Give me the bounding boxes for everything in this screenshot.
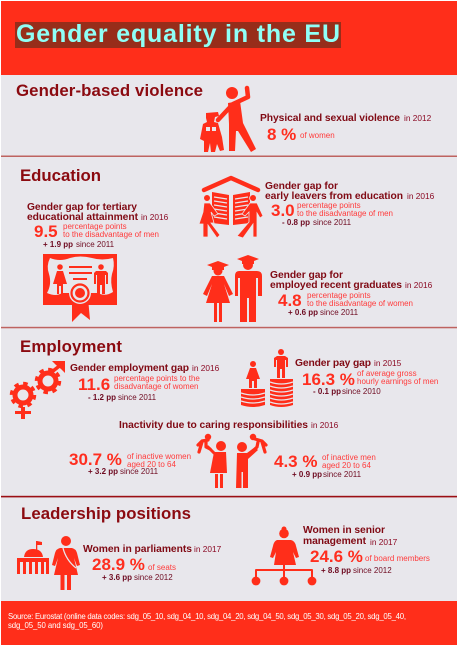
text: inactive women: 30.7 % [69, 450, 122, 469]
text: employment gap: since 2011 [118, 393, 157, 402]
text: physical and sexual violence: in 2012 [404, 113, 432, 123]
text: women in parliaments: Women in parliaments [83, 544, 192, 555]
text: women in senior management: in 2017 [370, 537, 398, 547]
source note [8, 612, 406, 630]
text: employment gap: 11.6 [78, 375, 110, 394]
text: early leavers: percentage points [297, 201, 361, 210]
text: pay gap: in 2015 [374, 358, 402, 368]
header banner [1, 1, 457, 75]
heading: leadership positions: Leadership positions [21, 504, 191, 523]
icon: pay gap coins [241, 349, 293, 407]
heading: employment: Employment [20, 337, 122, 356]
text: women in senior management: since 2012 [353, 566, 392, 575]
icon: woman manager and organisation chart [252, 526, 316, 585]
text: inactive men: 4.3 % [274, 452, 317, 471]
text: women in parliaments [83, 544, 222, 582]
source note: Source: Eurostat (online data codes: sdg_05_10, sdg_04_10, sdg_04_20, sdg_04_50, sdg_05_30, sdg_05_20, sdg_05_40, [8, 612, 406, 621]
text: employment gap: - 1.2 pp [88, 393, 116, 402]
text: employed graduates: since 2011 [320, 308, 359, 317]
text: pay gap: since 2010 [342, 387, 381, 396]
text: pay gap: 16.3 % [302, 370, 355, 389]
text: women in senior management: 24.6 % [310, 547, 363, 566]
text: inactive women: aged 20 to 64 [127, 460, 176, 469]
icon: diploma [43, 254, 117, 322]
title: Gender equality in the EU [16, 20, 340, 48]
text: pay gap: hourly earnings of men [357, 377, 438, 386]
text: early leavers: to the disadvantage of men [297, 209, 393, 218]
text: employed graduates: 4.8 [278, 291, 302, 310]
heading: gender-based violence: Gender-based violence [16, 81, 203, 100]
text: early leavers: early leavers from education [265, 191, 403, 202]
text: inactive women: of inactive women [127, 452, 191, 461]
text: tertiary attainment: + 1.9 pp [43, 240, 73, 249]
text: tertiary attainment: percentage points [63, 222, 127, 231]
source note: sdg_05_50 and sdg_05_60) [8, 621, 103, 630]
panel: leadership positions [17, 504, 430, 590]
text: tertiary attainment: Gender gap for tertiary [27, 202, 137, 213]
icon: early leavers with book [199, 178, 263, 238]
heading: education: Education [20, 166, 101, 185]
text: physical and sexual violence [260, 113, 432, 144]
text: early leavers: - 0.8 pp [282, 218, 310, 227]
text: women in senior management [303, 525, 430, 575]
text: inactive men: aged 20 to 64 [322, 461, 371, 470]
text: employed graduates: + 0.6 pp [288, 308, 318, 317]
text: employment gap: in 2016 [192, 363, 220, 373]
text: women in parliaments: 28.9 % [92, 555, 145, 574]
text: pay gap: of average gross [357, 369, 417, 378]
text: tertiary attainment: to the disadvantage of men [63, 230, 159, 239]
text: employed graduates: percentage points [307, 291, 371, 300]
icon: parents lifting babies [198, 434, 266, 488]
text: tertiary attainment [27, 202, 169, 249]
text: employed graduates: to the disadvantage of women [307, 299, 413, 308]
text: early leavers: in 2016 [407, 191, 435, 201]
text: tertiary attainment: educational attainment [27, 212, 139, 223]
text: women in senior management: management [303, 536, 367, 547]
text: women in parliaments: since 2012 [134, 573, 173, 582]
text: inactive men [274, 452, 376, 479]
text: employment gap: disadvantage of women [114, 382, 198, 391]
text: women in senior management: Women in senior [303, 525, 385, 536]
text: early leavers: since 2011 [313, 218, 352, 227]
text: employment gap: Gender employment gap [70, 363, 189, 374]
text: early leavers [265, 181, 435, 227]
text: women in parliaments: in 2017 [194, 544, 222, 554]
text: employment gap: percentage points to the [114, 374, 200, 383]
text: pay gap: - 0.1 pp [313, 387, 341, 396]
text: early leavers: Gender gap for [265, 181, 338, 192]
text: employed graduates: in 2016 [405, 280, 433, 290]
text: early leavers: 3.0 [271, 201, 295, 220]
footer [1, 601, 457, 645]
text: employed graduates: Gender gap for [270, 270, 343, 281]
text: inactive women: + 3.2 pp [88, 467, 118, 476]
text: pay gap [295, 358, 438, 396]
text: inactive men: + 0.9 pp [292, 470, 322, 479]
text: inactive men: since 2011 [323, 470, 362, 479]
text: women in parliaments: of seats [148, 563, 176, 572]
panel: employment [12, 337, 438, 488]
text: women in senior management: of board members [365, 554, 430, 563]
text: physical and sexual violence: Physical and sexual violence [260, 113, 400, 124]
text: tertiary attainment: since 2011 [76, 240, 115, 249]
icon: violence against a woman [200, 87, 256, 152]
text: tertiary attainment: in 2016 [141, 212, 169, 222]
text: employed graduates: employed recent graduates [270, 280, 402, 291]
text: inactive men: of inactive men [322, 453, 376, 462]
text: employment gap [70, 363, 220, 402]
heading: inactivity: Inactivity due to caring responsibilities [119, 420, 308, 431]
text: physical and sexual violence: of women [300, 131, 335, 140]
text: tertiary attainment: 9.5 [34, 222, 58, 241]
icon: gender gears [12, 361, 65, 419]
text: employed graduates [270, 270, 433, 317]
text: physical and sexual violence: 8 % [267, 125, 296, 144]
panel: education [20, 166, 435, 322]
text: inactive women: since 2011 [120, 467, 159, 476]
text: women in parliaments: + 3.6 pp [102, 573, 132, 582]
panel: gender-based violence [16, 81, 432, 152]
text: pay gap: Gender pay gap [295, 358, 371, 369]
heading: inactivity: in 2016 [311, 420, 339, 430]
icon: graduates [203, 255, 262, 322]
text: women in senior management: + 8.8 pp [321, 566, 351, 575]
text: inactive women [69, 450, 191, 476]
icon: parliament and woman [17, 536, 80, 590]
